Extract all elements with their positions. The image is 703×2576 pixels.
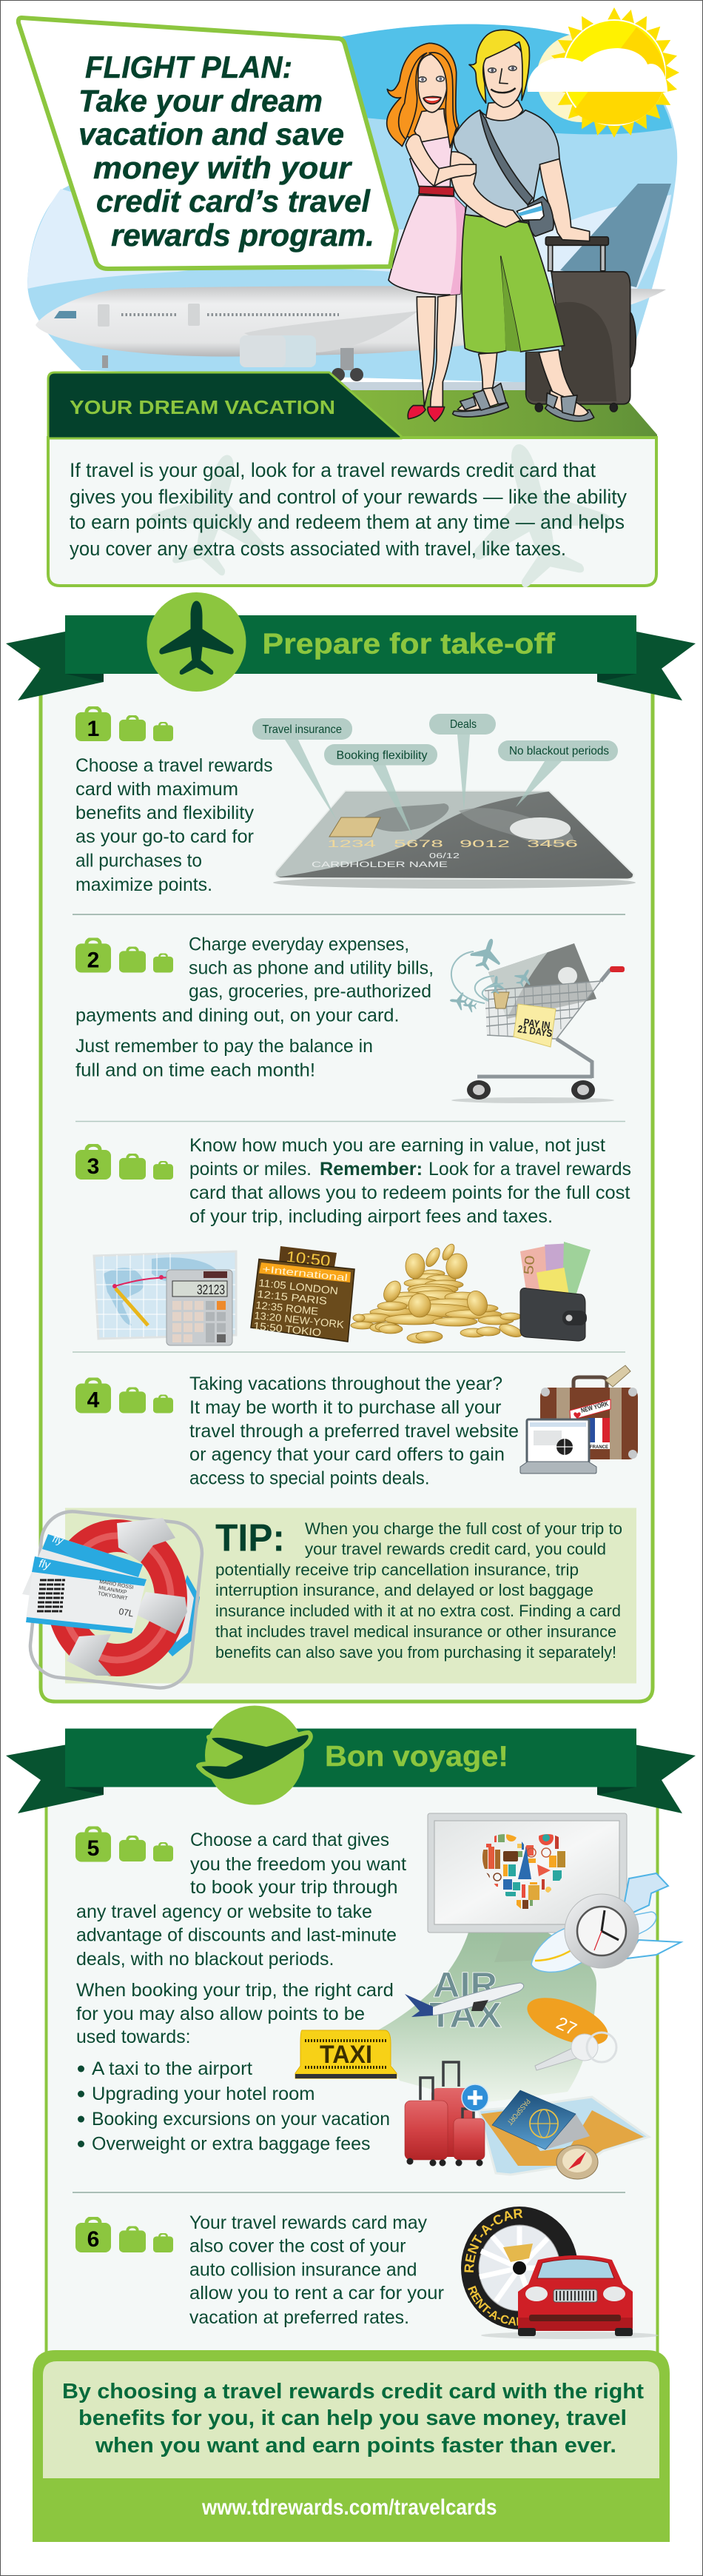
- icon: suitcase with laptop: FRANCE: [590, 1445, 609, 1450]
- step 1 text: Choose a travel rewards: [75, 755, 272, 776]
- step 1 text: benefits and flexibility: [75, 803, 255, 823]
- step 2 text: Just remember to pay the balance in: [75, 1036, 373, 1057]
- closing message: when you want and earn points faster than ever.: [95, 2434, 616, 2458]
- title callout: [18, 18, 397, 269]
- luggage badge 5: 5: [87, 1836, 99, 1861]
- benefits bullet list: [78, 2058, 390, 2155]
- icon: hotel room key: [521, 1988, 616, 2070]
- callout: booking flexibility: [324, 744, 437, 766]
- icon: pile of gold coins: [351, 1242, 523, 1343]
- icon: taxi sign: [295, 2030, 397, 2078]
- icon: plane top view: [147, 592, 246, 692]
- icon: life ring with boarding passes: TOKYO/NRT: [98, 1591, 129, 1602]
- airplane tail: [560, 184, 671, 287]
- step 5: [75, 1813, 681, 2179]
- step 3 text: [189, 1135, 631, 1227]
- step 5 text: for you may also allow points to be: [76, 2004, 365, 2024]
- step 3 text: points or miles.: [189, 1159, 312, 1180]
- step 6 text: also cover the cost of your: [189, 2236, 406, 2257]
- closing panel: [33, 2350, 670, 2542]
- tip label: TIP:: [215, 1516, 285, 1559]
- credit card: 06/12: [429, 852, 460, 860]
- intro header: [48, 372, 401, 438]
- icon: hotel room key: 27: [553, 2013, 579, 2040]
- luggage badge 1: [75, 707, 173, 741]
- step 1 text: all purchases to: [75, 850, 202, 871]
- grass strip: [329, 390, 657, 438]
- credit card: [273, 791, 636, 889]
- icon: wallet with banknotes: 50: [521, 1255, 537, 1275]
- icon: flight departure board: [251, 1246, 354, 1342]
- suitcase: [526, 237, 636, 412]
- panel: tip: [22, 1508, 636, 1691]
- callout: travel insurance: Travel insurance: [262, 723, 342, 736]
- step 4 text: access to special points deals.: [189, 1468, 429, 1488]
- section heading: Prepare for take-off: [262, 628, 556, 660]
- callout pointers: [285, 735, 562, 837]
- benefits bullet list: Overweight or extra baggage fees: [92, 2134, 370, 2155]
- step 3 text: Look for a travel rewards: [428, 1159, 631, 1180]
- icon: red suitcases: [405, 2062, 488, 2167]
- icon: life ring with boarding passes: 07L: [118, 1606, 135, 1619]
- icon: flight departure board: 12:15 PARIS: [257, 1288, 328, 1307]
- icon: departing plane: [198, 1706, 311, 1805]
- ribbon: prepare for take-off: [6, 592, 696, 700]
- step 5 text: deals, with no blackout periods.: [76, 1949, 334, 1970]
- luggage badge 3: 3: [87, 1154, 99, 1179]
- tip text: benefits can also save you from purchasing it separately!: [215, 1643, 616, 1662]
- tip text: that includes travel medical insurance or other insurance: [215, 1622, 616, 1641]
- icon: flight departure board: 10:50: [285, 1248, 332, 1270]
- tip text: [215, 1519, 622, 1662]
- step 5 text: used towards:: [76, 2027, 191, 2047]
- closing message box: [43, 2361, 659, 2478]
- step 5 text: [75, 1827, 406, 2047]
- couple with suitcase: [387, 30, 636, 421]
- icon: monitor with travel heart: [428, 1813, 628, 1933]
- icon: air tax with jet: [405, 1966, 524, 2035]
- title callout: vacation and save: [78, 117, 344, 151]
- luggage badge 1: 1: [87, 717, 99, 741]
- panel: prepare for take-off: [41, 670, 653, 1702]
- step 5 text: you the freedom you want: [190, 1854, 406, 1875]
- luggage badge 6: 6: [87, 2227, 99, 2252]
- step 4 text: Taking vacations throughout the year?: [189, 1374, 502, 1394]
- icon: suitcase with laptop: NEW YORK: [580, 1399, 610, 1414]
- icon: air tax with jet: AIR: [433, 1966, 497, 2005]
- intro body: [48, 438, 656, 586]
- icon: life ring with boarding passes: fly: [38, 1557, 53, 1572]
- icon: suitcase with laptop: [520, 1365, 638, 1473]
- tip text: interruption insurance, and delayed or lost baggage: [215, 1581, 593, 1599]
- title callout: rewards program.: [111, 218, 374, 252]
- icon: map, passport and compass: PASSPORT: [505, 2097, 531, 2126]
- woman: [387, 43, 476, 421]
- icon: map, passport and compass: [479, 2090, 649, 2179]
- icon: life ring with boarding passes: [22, 1508, 205, 1691]
- closing message: [62, 2380, 644, 2458]
- step 2 text: such as phone and utility bills,: [189, 958, 434, 979]
- step 5 text: to book your trip through: [190, 1877, 398, 1898]
- man: [434, 30, 594, 421]
- credit card: 9012: [460, 837, 510, 849]
- tip text: potentially receive trip cancellation insurance, trip: [215, 1561, 579, 1579]
- step 4 text: or agency that your card offers to gain: [189, 1444, 505, 1465]
- runway: [326, 382, 619, 390]
- step 6: [75, 2207, 659, 2339]
- callout: travel insurance: [252, 718, 352, 740]
- step 4 text: [189, 1374, 519, 1488]
- step 5 text: any travel agency or website to take: [76, 1901, 372, 1922]
- intro paragraph: [70, 459, 628, 560]
- step 2 text: payments and dining out, on your card.: [75, 1006, 400, 1026]
- step 6 text: [189, 2212, 444, 2328]
- icon: flight departure board: 13:20 NEW-YORK: [254, 1309, 345, 1331]
- step 3 text: Remember:: [320, 1159, 423, 1180]
- callout: no blackout periods: [498, 740, 618, 761]
- intro paragraph: to earn points quickly and redeem them at any time — and helps: [70, 511, 625, 533]
- intro paragraph: If travel is your goal, look for a travel rewards credit card that: [70, 459, 596, 481]
- title callout: credit card’s travel: [96, 184, 371, 218]
- icon: flight departure board: 12:35 ROME: [255, 1299, 319, 1317]
- icon: rent-a-car tire and red car: [461, 2207, 659, 2339]
- luggage badge 5: [75, 1827, 173, 1861]
- title callout: Take your dream: [78, 83, 323, 118]
- credit card: 5678: [394, 837, 443, 849]
- step 6 text: Your travel rewards card may: [189, 2212, 427, 2233]
- icon: wallet with banknotes: [520, 1242, 591, 1341]
- step 4: [75, 1365, 638, 1488]
- woman's hand resting on arm: [434, 164, 476, 186]
- icon: calculator: 32123: [197, 1282, 225, 1297]
- benefits bullet list: Booking excursions on your vacation: [92, 2109, 390, 2130]
- step 3 text: of your trip, including airport fees and taxes.: [189, 1206, 553, 1227]
- panel: your dream vacation intro: [48, 372, 656, 598]
- title callout: FLIGHT PLAN:: [85, 50, 292, 84]
- step 6 text: allow you to rent a car for your: [189, 2283, 444, 2304]
- shopping cart with card and planes: 21 DAYS: [517, 1023, 553, 1040]
- icon: flight departure board: 11:05 LONDON: [258, 1277, 339, 1297]
- credit card: 1234: [327, 837, 376, 849]
- panel: bon voyage: [46, 1784, 657, 2355]
- icon: flight departure board: +International: [262, 1263, 349, 1283]
- callout: deals: Deals: [450, 718, 477, 731]
- luggage badge 2: 2: [87, 948, 99, 973]
- step 1 text: as your go-to card for: [75, 826, 254, 847]
- icon: life ring with boarding passes: MARIO ROSSI: [99, 1579, 134, 1590]
- step 1: [75, 707, 636, 895]
- green road swoosh: [374, 1933, 596, 2103]
- tip text: When you charge the full cost of your trip to: [305, 1519, 622, 1538]
- watermark planes: [141, 426, 622, 598]
- step 6 text: vacation at preferred rates.: [189, 2307, 409, 2328]
- step 3 text: Know how much you are earning in value, not just: [189, 1135, 605, 1156]
- step 4 text: It may be worth it to purchase all your: [189, 1397, 502, 1418]
- ribbon: bon voyage: [6, 1706, 696, 1813]
- sky: [27, 24, 677, 385]
- benefits bullet list: A taxi to the airport: [92, 2058, 252, 2079]
- step 3 text: card that allows you to redeem points for the full cost: [189, 1182, 630, 1203]
- step 5 text: When booking your trip, the right card: [76, 1980, 394, 2001]
- step 6 text: auto collision insurance and: [189, 2260, 417, 2281]
- step 5 text: Choose a card that gives: [190, 1830, 389, 1850]
- step 2 text: [75, 934, 434, 1081]
- icon: air tax with jet: TAX: [429, 1996, 502, 2035]
- credit card: CARDHOLDER NAME: [312, 860, 448, 869]
- icon: life ring with boarding passes: fly: [51, 1533, 65, 1547]
- step 4 text: travel through a preferred travel website: [189, 1421, 519, 1442]
- luggage badge 3: [75, 1145, 173, 1180]
- step 1 text: card with maximum: [75, 779, 238, 800]
- callout: deals: [429, 714, 496, 735]
- heart of travel icons: [482, 1830, 565, 1910]
- tip text: your travel rewards credit card, you could: [305, 1540, 606, 1558]
- intro paragraph: you cover any extra costs associated with travel, like taxes.: [70, 538, 566, 560]
- tip text: insurance included with it at no extra cost. Finding a card: [215, 1602, 621, 1620]
- luggage badge 2: [75, 939, 173, 973]
- hero illustration: sky, airplane and sun: [27, 7, 679, 390]
- sun and cloud: [528, 7, 679, 138]
- callout: no blackout periods: No blackout periods: [509, 745, 609, 757]
- icon: life ring with boarding passes: MILAN/MXP: [98, 1585, 127, 1596]
- step 2 text: Charge everyday expenses,: [189, 934, 409, 955]
- icon: calculator: [166, 1270, 232, 1345]
- section heading: Bon voyage!: [325, 1741, 508, 1773]
- step 2: [75, 934, 625, 1103]
- icon: taxi sign: TAXI: [320, 2041, 372, 2069]
- luggage badge 4: [75, 1379, 173, 1413]
- benefits bullet list: Upgrading your hotel room: [92, 2084, 315, 2104]
- icon: map: [94, 1251, 236, 1339]
- credit card: 3456: [527, 837, 578, 849]
- shopping cart with card and planes: [449, 934, 625, 1103]
- shopping cart with card and planes: PAY IN: [523, 1016, 551, 1031]
- luggage badge 4: 4: [87, 1388, 100, 1413]
- step 3: [75, 1135, 631, 1345]
- closing message: By choosing a travel rewards credit card with the right: [62, 2380, 644, 2403]
- title callout: money with your: [93, 150, 353, 185]
- step 2 text: full and on time each month!: [75, 1060, 315, 1081]
- icon: rent-a-car tire and red car: RENT-A-CAR: [468, 2285, 518, 2326]
- airplane: [36, 286, 666, 381]
- step 5 text: advantage of discounts and last-minute: [76, 1925, 397, 1946]
- step 1 text: [75, 755, 272, 895]
- icon: white airplane and clock: [531, 1873, 681, 1972]
- icon: rent-a-car tire and red car: RENT-A-CAR: [464, 2209, 522, 2272]
- website url: www.tdrewards.com/travelcards: [201, 2495, 497, 2520]
- closing message: benefits for you, it can help you save money, travel: [78, 2406, 627, 2430]
- step 1 text: maximize points.: [75, 874, 212, 895]
- header label: YOUR DREAM VACATION: [70, 396, 335, 418]
- icon: flight departure board: 15:50 TOKIO: [253, 1319, 322, 1339]
- luggage badge 6: [75, 2218, 173, 2252]
- step 2 text: gas, groceries, pre-authorized: [189, 981, 431, 1002]
- intro paragraph: gives you flexibility and control of your rewards — like the ability: [70, 486, 628, 508]
- callout: booking flexibility: Booking flexibility: [336, 749, 428, 762]
